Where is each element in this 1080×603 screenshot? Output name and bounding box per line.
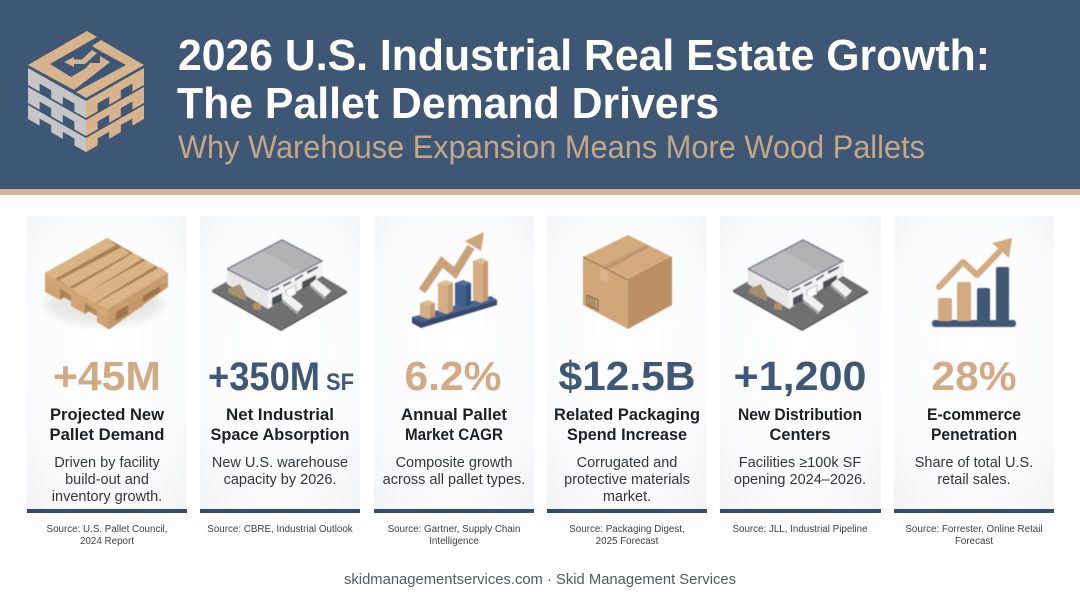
source note: Source: Gartner, Supply Chain <box>388 524 520 535</box>
description: build-out and <box>65 472 149 488</box>
panel: distribution centers <box>720 216 881 513</box>
description <box>52 455 162 505</box>
metric heading: Spend Increase <box>567 425 687 444</box>
metric heading: Space Absorption <box>210 425 350 444</box>
metric heading: Penetration <box>931 425 1017 444</box>
description <box>212 455 348 488</box>
source note: 2025 Forecast <box>596 536 659 547</box>
title line 2: The Pallet Demand Drivers <box>177 79 719 128</box>
metric heading: Annual Pallet <box>401 405 507 424</box>
panel: packaging spend <box>547 216 707 513</box>
panel: market CAGR <box>374 216 534 513</box>
source note <box>47 524 167 547</box>
source note: Source: JLL, Industrial Pipeline <box>732 524 868 535</box>
description <box>915 455 1033 488</box>
icon: bar chart with arrow <box>932 238 1016 327</box>
icon: warehouse <box>212 240 347 331</box>
metric heading: Centers <box>770 425 830 444</box>
metric value: 6.2% <box>404 353 502 399</box>
icon: company logo cube <box>28 31 144 152</box>
source note: Source: Packaging Digest, <box>569 524 685 535</box>
panel: space absorption <box>200 216 360 513</box>
metric heading: Projected New <box>50 405 165 424</box>
source note: Intelligence <box>429 536 479 547</box>
metric heading <box>554 405 700 444</box>
source note: Forecast <box>955 536 993 547</box>
icon: cardboard box <box>583 235 672 329</box>
description: opening 2024–2026. <box>734 472 866 488</box>
metric heading <box>738 405 862 444</box>
description: protective materials <box>564 472 690 488</box>
description: Share of total U.S. <box>915 455 1033 471</box>
source note: 2024 Report <box>80 536 134 547</box>
description <box>734 455 866 488</box>
metric value: +1,200 <box>734 353 866 399</box>
metric value: 28% <box>932 353 1016 399</box>
metric heading: E-commerce <box>927 405 1021 424</box>
description <box>564 455 690 505</box>
description: capacity by 2026. <box>224 472 336 488</box>
description: market. <box>603 489 651 505</box>
description: Facilities ≥100k SF <box>739 455 861 471</box>
metric heading: Related Packaging <box>554 405 700 424</box>
icon: isometric bar chart <box>412 232 497 328</box>
icon: wood pallet <box>45 238 168 329</box>
panel: pallet demand <box>27 216 187 513</box>
metric value: +45M <box>53 353 161 399</box>
header band <box>0 0 1080 195</box>
description: Driven by facility <box>54 455 161 471</box>
metric heading <box>401 405 507 444</box>
metric value: SF <box>326 369 354 396</box>
metric heading <box>210 405 350 444</box>
source note: Source: CBRE, Industrial Outlook <box>207 524 353 535</box>
description <box>383 455 525 488</box>
description: New U.S. warehouse <box>212 455 348 471</box>
metric heading: Net Industrial <box>226 405 334 424</box>
title: 2026 U.S. Industrial Real Estate Growth: <box>178 31 990 80</box>
source note: Source: U.S. Pallet Council, <box>47 524 167 535</box>
source note <box>905 524 1043 547</box>
metric heading: Pallet Demand <box>50 425 164 444</box>
description: Corrugated and <box>577 455 677 471</box>
source note <box>569 524 685 547</box>
metric value: +350M <box>208 355 320 399</box>
subtitle: Why Warehouse Expansion Means More Wood Pallets <box>178 129 925 165</box>
description: retail sales. <box>937 472 1011 488</box>
description: inventory growth. <box>52 489 162 505</box>
metric heading: New Distribution <box>738 405 862 424</box>
panel: e-commerce penetration <box>894 216 1054 513</box>
metric heading <box>50 405 165 444</box>
source note <box>388 524 520 547</box>
source note: Source: Forrester, Online Retail <box>905 524 1043 535</box>
icon: warehouse <box>733 240 868 331</box>
metric value: $12.5B <box>558 353 696 399</box>
footer: skidmanagementservices.com · Skid Management Services <box>344 572 736 588</box>
metric heading: Market CAGR <box>405 425 503 444</box>
description: Composite growth <box>396 455 512 471</box>
metric heading <box>927 405 1021 444</box>
description: across all pallet types. <box>383 472 525 488</box>
